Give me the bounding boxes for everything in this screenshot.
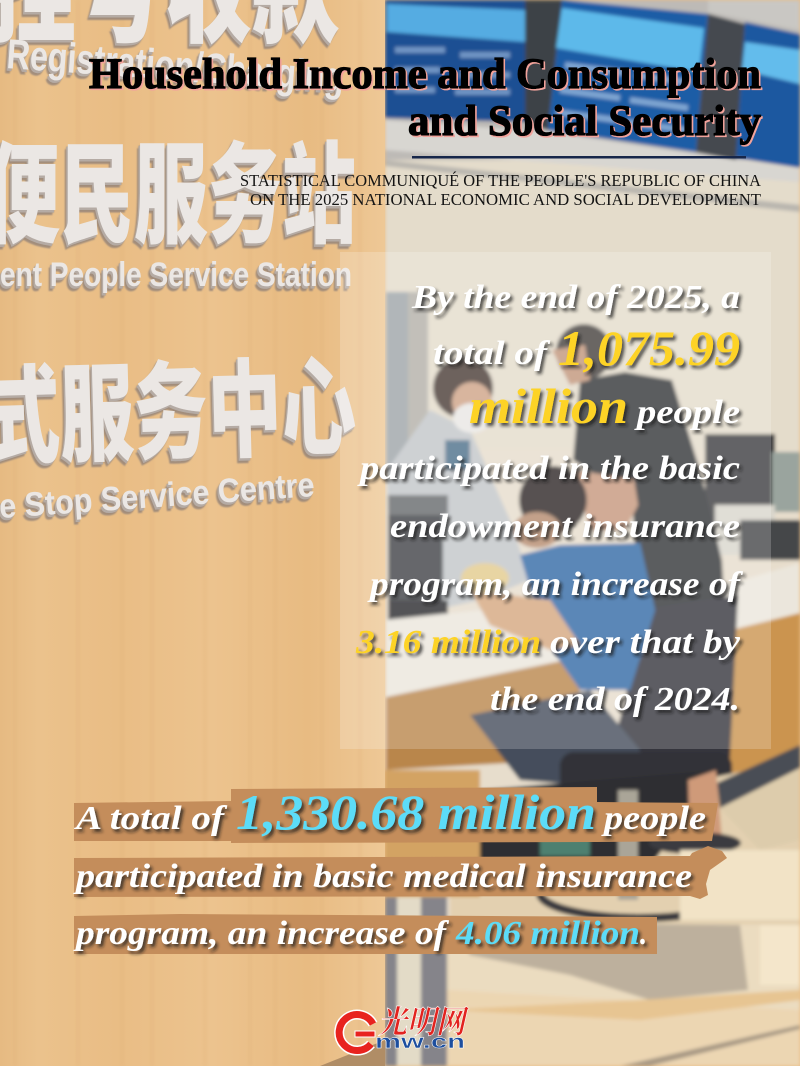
panel text: endowment insurance bbox=[390, 508, 740, 545]
title bbox=[89, 51, 761, 145]
logo characters: 光明网 bbox=[378, 997, 470, 1043]
panel text: the end of 2024. bbox=[490, 681, 740, 718]
wall sign lettering: e Stop Service Centre bbox=[0, 466, 316, 526]
medical text: A total of bbox=[74, 800, 228, 837]
medical text: participated in basic medical insurance bbox=[73, 858, 692, 895]
panel text: participated in the basic bbox=[357, 450, 740, 487]
panel: endowment insurance bbox=[340, 252, 771, 749]
logo domain: mw.cn bbox=[375, 1032, 465, 1053]
right side of photo bbox=[385, 0, 800, 1066]
chair bbox=[600, 595, 738, 790]
monitor one bbox=[385, 0, 525, 122]
panel text: over that by bbox=[550, 624, 741, 661]
subtitle bbox=[240, 171, 761, 209]
panel text: program, an increase of bbox=[367, 566, 744, 603]
back wall area behind staff bbox=[386, 292, 408, 472]
wall sign lettering bbox=[0, 0, 357, 526]
wood panel with vertical grain bbox=[0, 0, 385, 1066]
panel: medical insurance bbox=[73, 784, 727, 954]
counter bbox=[386, 608, 590, 697]
rear monitor bbox=[705, 434, 775, 524]
translucent panel bbox=[340, 252, 771, 749]
door post bbox=[385, 897, 447, 1066]
logo: Gmw.cn bbox=[339, 997, 470, 1053]
panel text: 3.16 million bbox=[355, 624, 541, 661]
desk monitor bbox=[388, 495, 443, 605]
subtitle: STATISTICAL COMMUNIQUÉ OF THE PEOPLE'S REPUBLIC OF CHINA bbox=[240, 171, 761, 190]
medical text: program, an increase of bbox=[73, 915, 450, 952]
medical text: . bbox=[640, 915, 647, 952]
panel text: people bbox=[634, 394, 740, 431]
logo G ring bbox=[339, 1015, 375, 1051]
standing man bbox=[573, 372, 725, 620]
medical text bbox=[73, 784, 706, 952]
medical text: 4.06 million bbox=[455, 915, 640, 952]
panel text: total of bbox=[433, 335, 551, 372]
panel text bbox=[355, 279, 744, 718]
lit wall bbox=[385, 160, 800, 450]
panel text: 1,075.99 bbox=[558, 320, 740, 376]
panel text: million bbox=[469, 378, 628, 434]
monitor two bbox=[548, 0, 708, 152]
subtitle: ON THE 2025 NATIONAL ECONOMIC AND SOCIAL DEVELOPMENT bbox=[250, 190, 761, 209]
wall sign lettering: Registration/Charging bbox=[5, 30, 346, 101]
monitor three bbox=[736, 22, 800, 168]
title: Household Income and Consumption bbox=[89, 51, 761, 98]
panel text: By the end of 2025, a bbox=[411, 279, 740, 316]
nurse bbox=[387, 410, 530, 620]
wall sign lettering: ent People Service Station bbox=[0, 256, 352, 294]
medical text: 1,330.68 million bbox=[236, 784, 596, 840]
title rule bbox=[412, 156, 746, 158]
highlight bands bbox=[74, 787, 727, 954]
floor and skirting bbox=[450, 760, 800, 1066]
medical text: people bbox=[601, 800, 706, 837]
title: and Social Security bbox=[408, 98, 761, 145]
patient bbox=[520, 543, 655, 690]
